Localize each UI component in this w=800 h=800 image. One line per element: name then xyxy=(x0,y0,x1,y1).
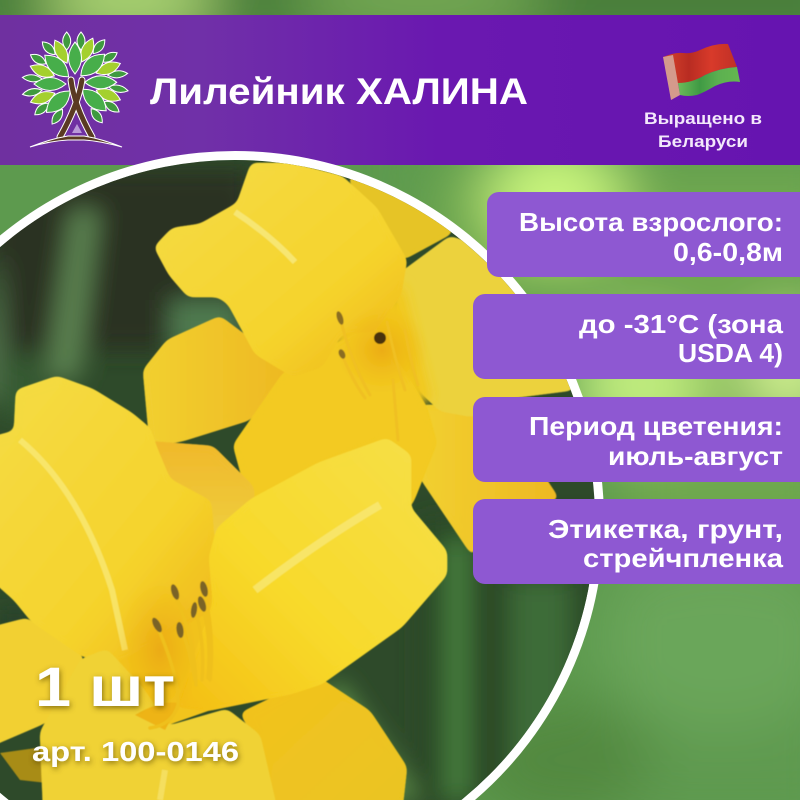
panel: package contents: стрейчпленка xyxy=(583,543,784,573)
panel: frost hardiness xyxy=(473,294,800,379)
purple header band xyxy=(0,15,800,165)
panel: blooming period xyxy=(473,397,800,482)
panel: frost hardiness: USDA 4) xyxy=(678,338,783,368)
panel: blooming period: Период цветения: xyxy=(529,411,783,441)
title: Лилейник ХАЛИНА xyxy=(150,71,528,112)
made in Belarus label xyxy=(644,109,762,151)
photo circle: yellow daylilies xyxy=(0,150,604,800)
icon: Belarus flag xyxy=(663,44,740,100)
panel: blooming period: июль-август xyxy=(608,441,783,471)
quantity: 1 шт xyxy=(35,655,175,718)
made in Belarus label: Беларуси xyxy=(658,132,748,151)
logo: tree xyxy=(22,32,129,147)
panel: height: Высота взрослого: xyxy=(519,207,783,237)
article number: арт. 100-0146 xyxy=(32,736,239,767)
panel: package contents: Этикетка, грунт, xyxy=(548,514,783,544)
panel: height: 0,6-0,8м xyxy=(673,237,783,267)
upper flower xyxy=(143,163,575,560)
panel: frost hardiness: до -31°С (зона xyxy=(579,309,784,339)
panel: height xyxy=(487,192,800,277)
made in Belarus label: Выращено в xyxy=(644,109,762,128)
lower flower xyxy=(0,376,447,800)
panel: package contents xyxy=(473,499,800,584)
